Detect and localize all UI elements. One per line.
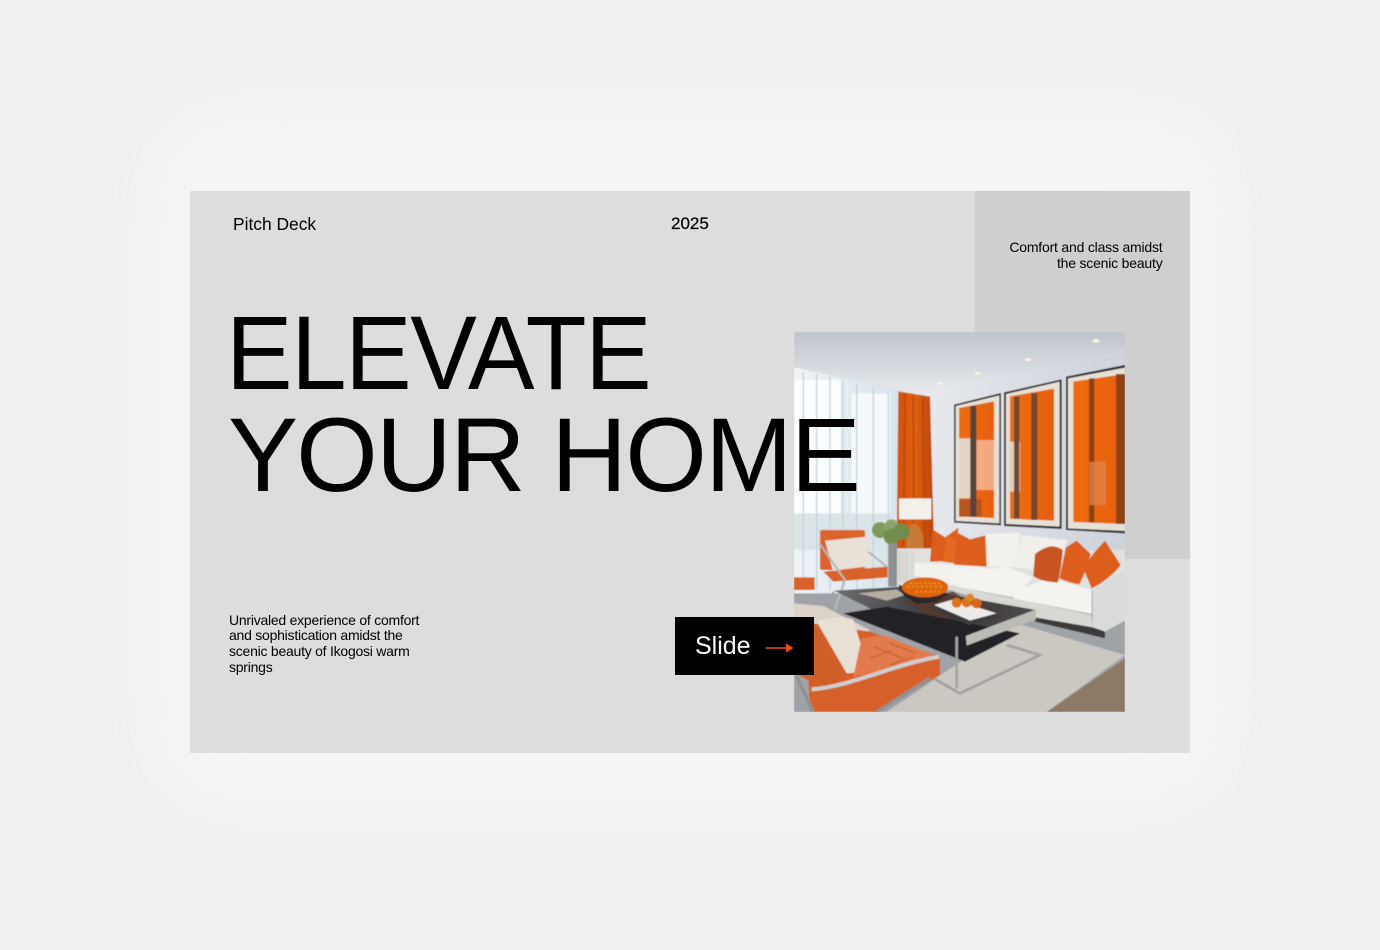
plant and vase — [872, 519, 910, 587]
wall art — [954, 365, 1125, 533]
label: pitch deck: Pitch Deck — [233, 214, 316, 234]
description — [229, 612, 420, 675]
heading: ELEVATE — [226, 295, 650, 412]
description: and sophistication amidst the — [229, 627, 403, 643]
icon: arrow — [766, 644, 794, 652]
tagline: Comfort and class amidst — [1009, 239, 1162, 255]
button label: Slide — [695, 632, 751, 660]
coffee table — [833, 587, 1040, 693]
panel: right accent block — [975, 191, 1190, 559]
armchair far left — [794, 530, 888, 613]
image: living room — [794, 332, 1125, 712]
button: slide — [675, 617, 814, 675]
heading — [226, 295, 859, 514]
orange pillows — [930, 528, 1121, 588]
window sheers — [794, 367, 898, 593]
description: Unrivaled experience of comfort — [229, 612, 419, 628]
tagline: the scenic beauty — [1057, 255, 1162, 271]
label: year: 2025 — [671, 214, 709, 233]
bowl of oranges — [898, 577, 948, 604]
description: springs — [229, 659, 272, 675]
orange curtain — [897, 391, 934, 548]
tray with fruit — [934, 594, 997, 625]
panel: slide — [190, 191, 1190, 753]
tagline — [1009, 239, 1163, 271]
ceiling lights — [937, 339, 1100, 385]
lamp — [899, 498, 931, 548]
description: scenic beauty of Ikogosi warm — [229, 643, 410, 659]
room background — [794, 332, 1125, 712]
heading: YOUR HOME — [228, 397, 859, 514]
sofa — [908, 533, 1125, 638]
foreground armchair — [794, 603, 940, 712]
